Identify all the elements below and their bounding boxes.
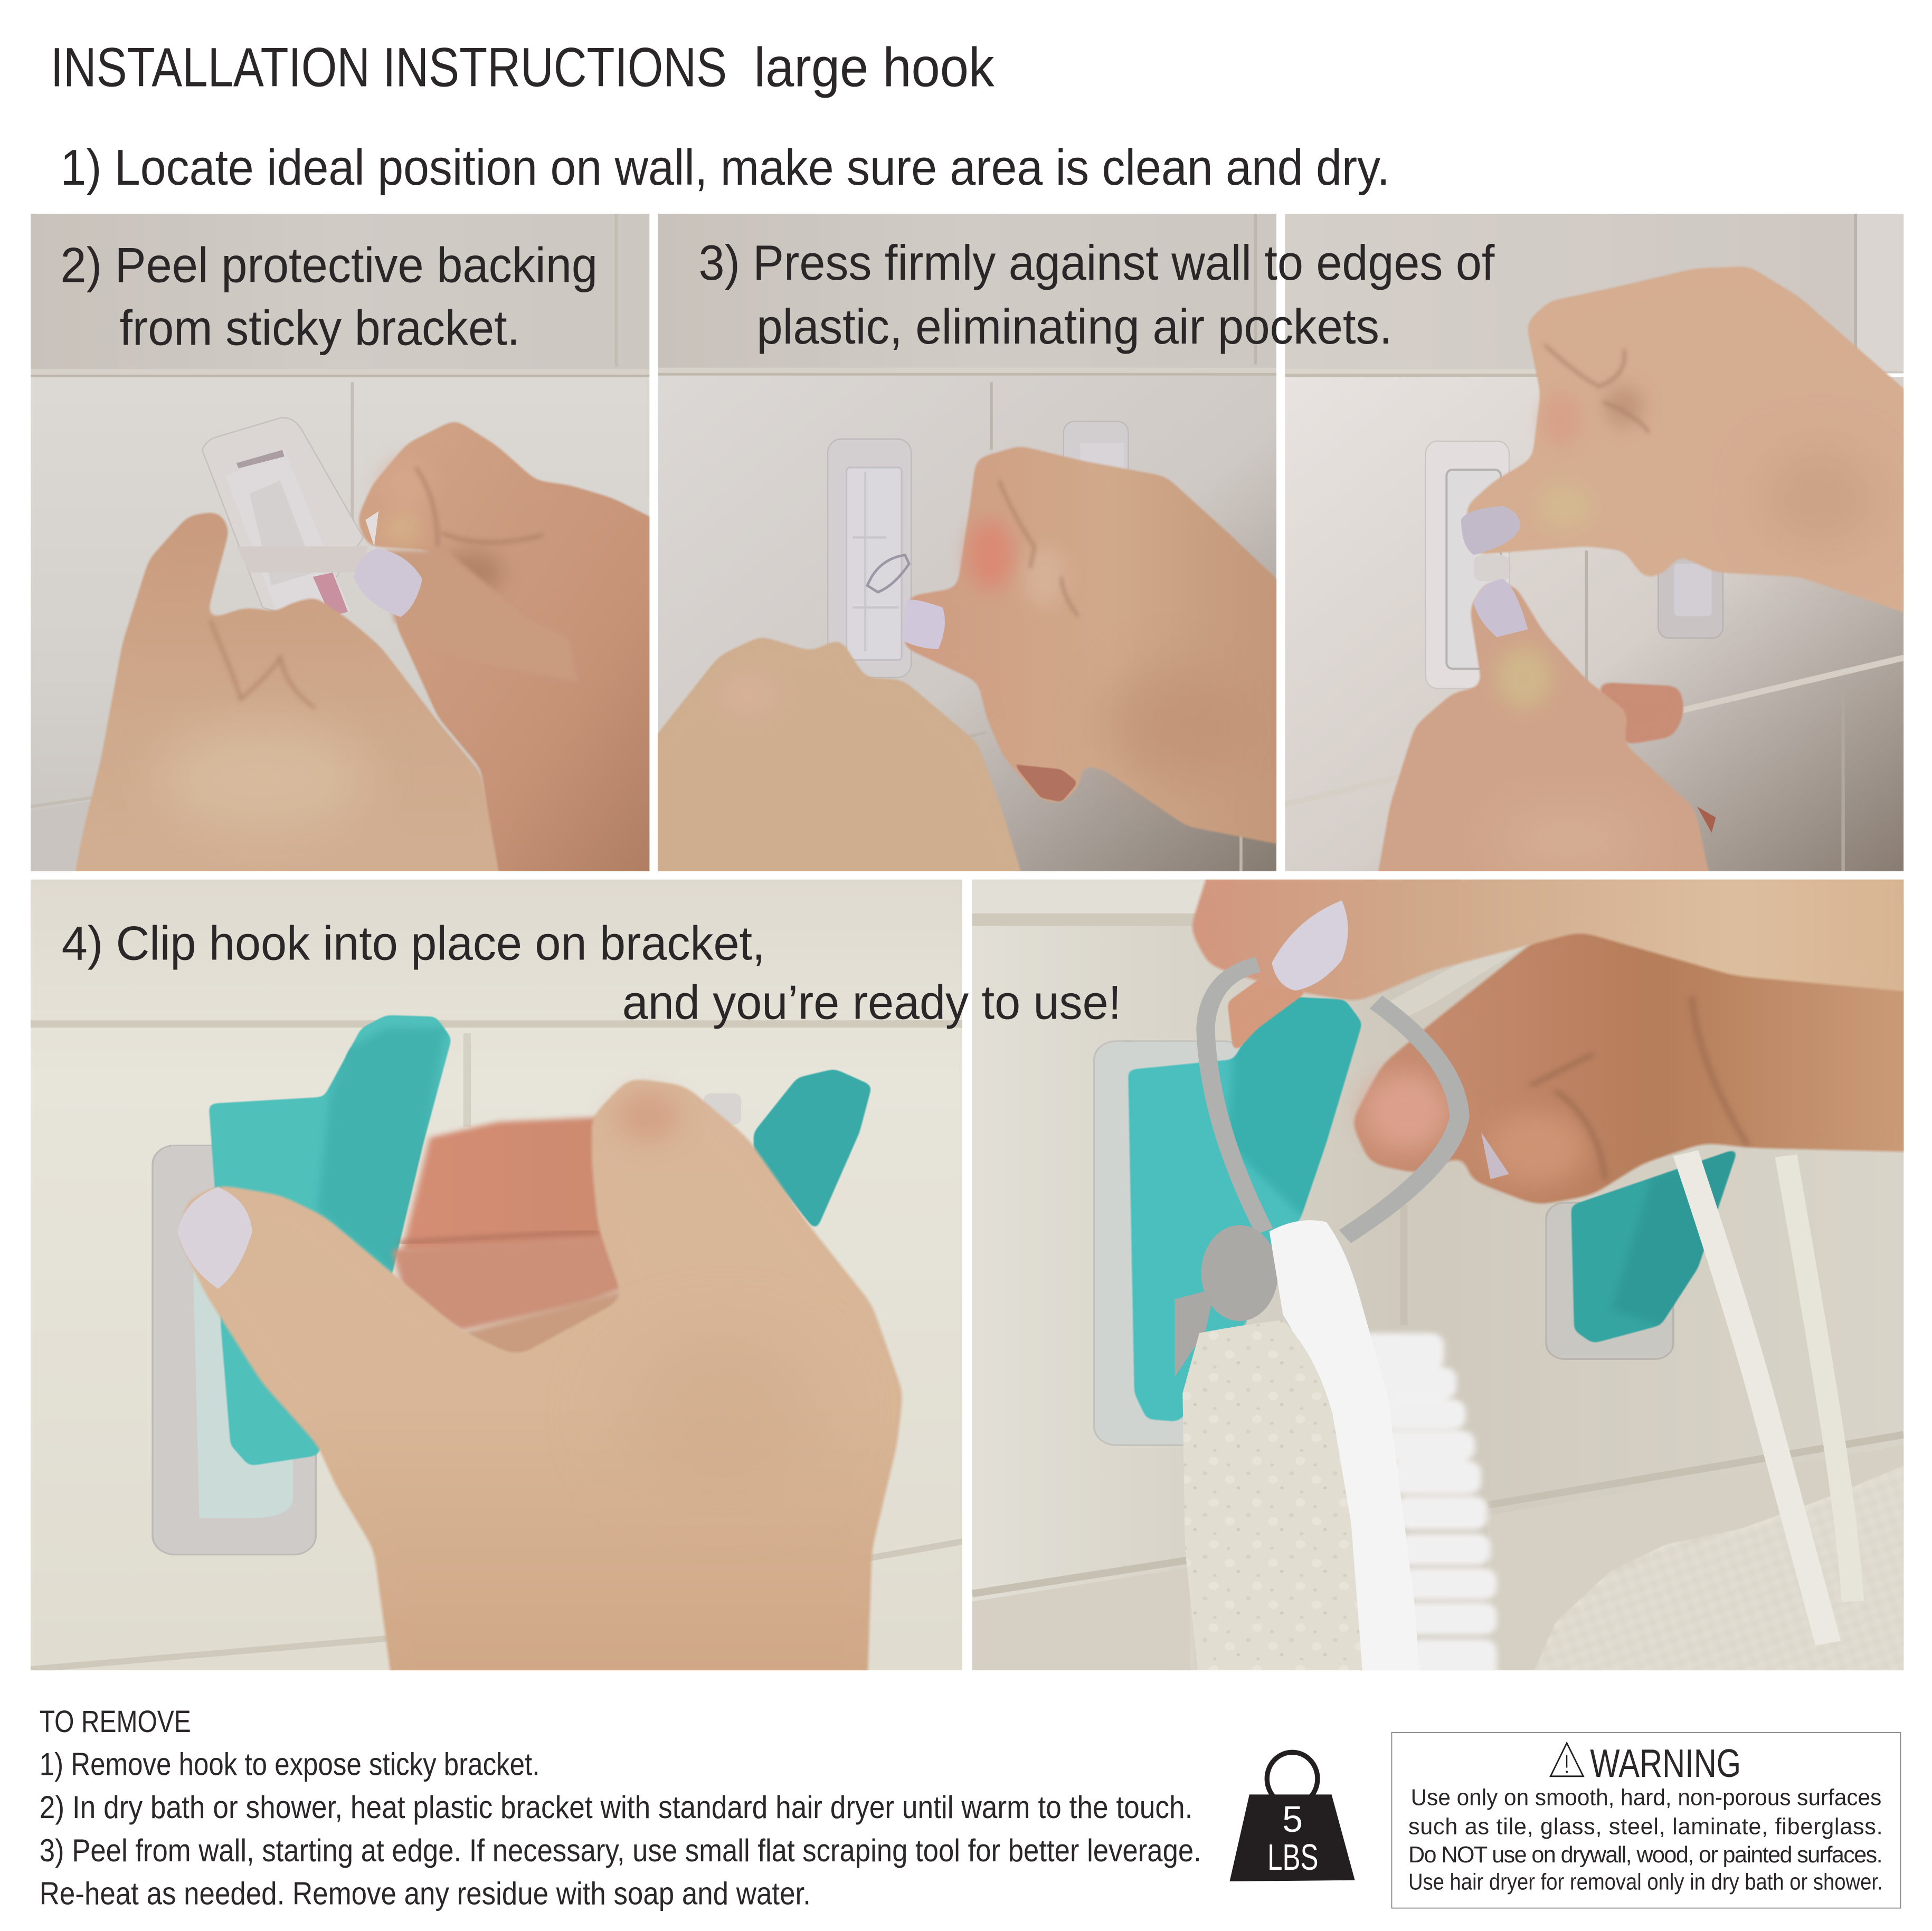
left hand (619, 636, 1036, 922)
wall gap between fingers (1388, 916, 1546, 1023)
to remove instructions: TO REMOVE (40, 1705, 191, 1739)
panel: step 3 press bracket photo A (619, 214, 1320, 922)
step 3 text: plastic, eliminating air pockets. (756, 299, 1393, 354)
title: INSTALLATION INSTRUCTIONS (51, 36, 727, 98)
finger behind hook (1227, 971, 1308, 1054)
panel: step 4 ready to use photo (972, 851, 1932, 1706)
to remove instructions: Re-heat as needed. Remove any residue with soap and water. (40, 1876, 811, 1911)
lilac nail (1272, 900, 1348, 991)
step 4 text (62, 917, 1121, 1029)
lilac nail (902, 600, 945, 649)
warning box (1391, 1733, 1900, 1908)
tile wall (31, 880, 962, 1670)
grey cord (1175, 965, 1460, 1377)
scrub brush bristles (1357, 1333, 1497, 1681)
warning heading: WARNING (1590, 1741, 1741, 1785)
sticky bracket (202, 418, 363, 621)
tile wall (972, 880, 1903, 1670)
lilac nail (1474, 579, 1528, 637)
lower tile wall (1285, 377, 1903, 871)
to remove instructions: 1) Remove hook to expose sticky bracket. (40, 1746, 539, 1782)
fingers behind thumb (392, 1117, 641, 1356)
peeled film (236, 546, 367, 573)
thumb and upper hand (1190, 851, 1932, 1002)
left hand (65, 511, 508, 922)
title: large hook (754, 36, 995, 98)
right hand (902, 445, 1320, 852)
upper tile wall (1285, 214, 1903, 373)
icon: warning triangle (1550, 1743, 1583, 1776)
step 4 text: 4) Clip hook into place on bracket, (62, 917, 765, 970)
loofah (1518, 1445, 1932, 1706)
step 3 text (698, 235, 1495, 354)
to remove instructions: 2) In dry bath or shower, heat plastic bracket with standard hair dryer until warm to the touch. (40, 1789, 1192, 1825)
warning text (1408, 1785, 1883, 1895)
sticky bracket (828, 439, 911, 678)
panel: step 2 peel backing photo (31, 213, 649, 871)
background bracket (1064, 422, 1128, 478)
step 1 text: 1) Locate ideal position on wall, make sure area is clean and dry. (60, 139, 1390, 196)
white rope (1685, 1153, 1853, 1643)
step 4 text: and you’re ready to use! (622, 976, 1121, 1029)
pumice stone (1182, 1320, 1363, 1685)
step 3 text: 3) Press firmly against wall to edges of (698, 235, 1495, 290)
warning text: Do NOT use on drywall, wood, or painted surfaces. (1408, 1842, 1883, 1868)
upper tile wall (658, 214, 1276, 373)
step 2 text: from sticky bracket. (119, 300, 520, 356)
background bracket (1658, 555, 1723, 638)
right hand (354, 421, 649, 871)
teal hooks (1128, 997, 1738, 1422)
panel: step 4 clip hook photo (31, 880, 962, 1732)
lilac nail (1461, 506, 1520, 555)
to remove instructions: 3) Peel from wall, starting at edge. If necessary, use small flat scraping tool for better leverage. (40, 1832, 1201, 1868)
upper tile wall (31, 214, 649, 373)
lower tile wall (31, 377, 649, 871)
hand (177, 1078, 903, 1732)
adhesive plate (153, 1093, 741, 1555)
lower tile wall (658, 376, 1276, 871)
icon: 5 lbs weight (1230, 1752, 1355, 1881)
icon: 5 lbs weight: LBS (1267, 1837, 1319, 1878)
step 2 text (60, 237, 598, 356)
warning text: Use only on smooth, hard, non-porous surfaces (1411, 1785, 1881, 1811)
white brush back (1270, 1220, 1420, 1685)
sticky bracket (1426, 441, 1509, 688)
pinky tip (1697, 806, 1716, 833)
warning text: such as tile, glass, steel, laminate, fiberglass. (1408, 1814, 1883, 1840)
lilac nail (354, 548, 422, 617)
lower hand (1369, 579, 1720, 922)
to remove instructions (40, 1705, 1201, 1911)
panel: step 3 press bracket photo B (1285, 214, 1932, 922)
teal hook (209, 1015, 872, 1466)
warning text: Use hair dryer for removal only in dry bath or shower. (1408, 1870, 1883, 1895)
icon: 5 lbs weight: 5 (1282, 1799, 1303, 1840)
adhesive plates (1094, 1041, 1673, 1445)
step 2 text: 2) Peel protective backing (60, 237, 598, 293)
lilac nail (177, 1187, 252, 1289)
hand (1190, 851, 1932, 1205)
upper hand (1461, 266, 1932, 630)
